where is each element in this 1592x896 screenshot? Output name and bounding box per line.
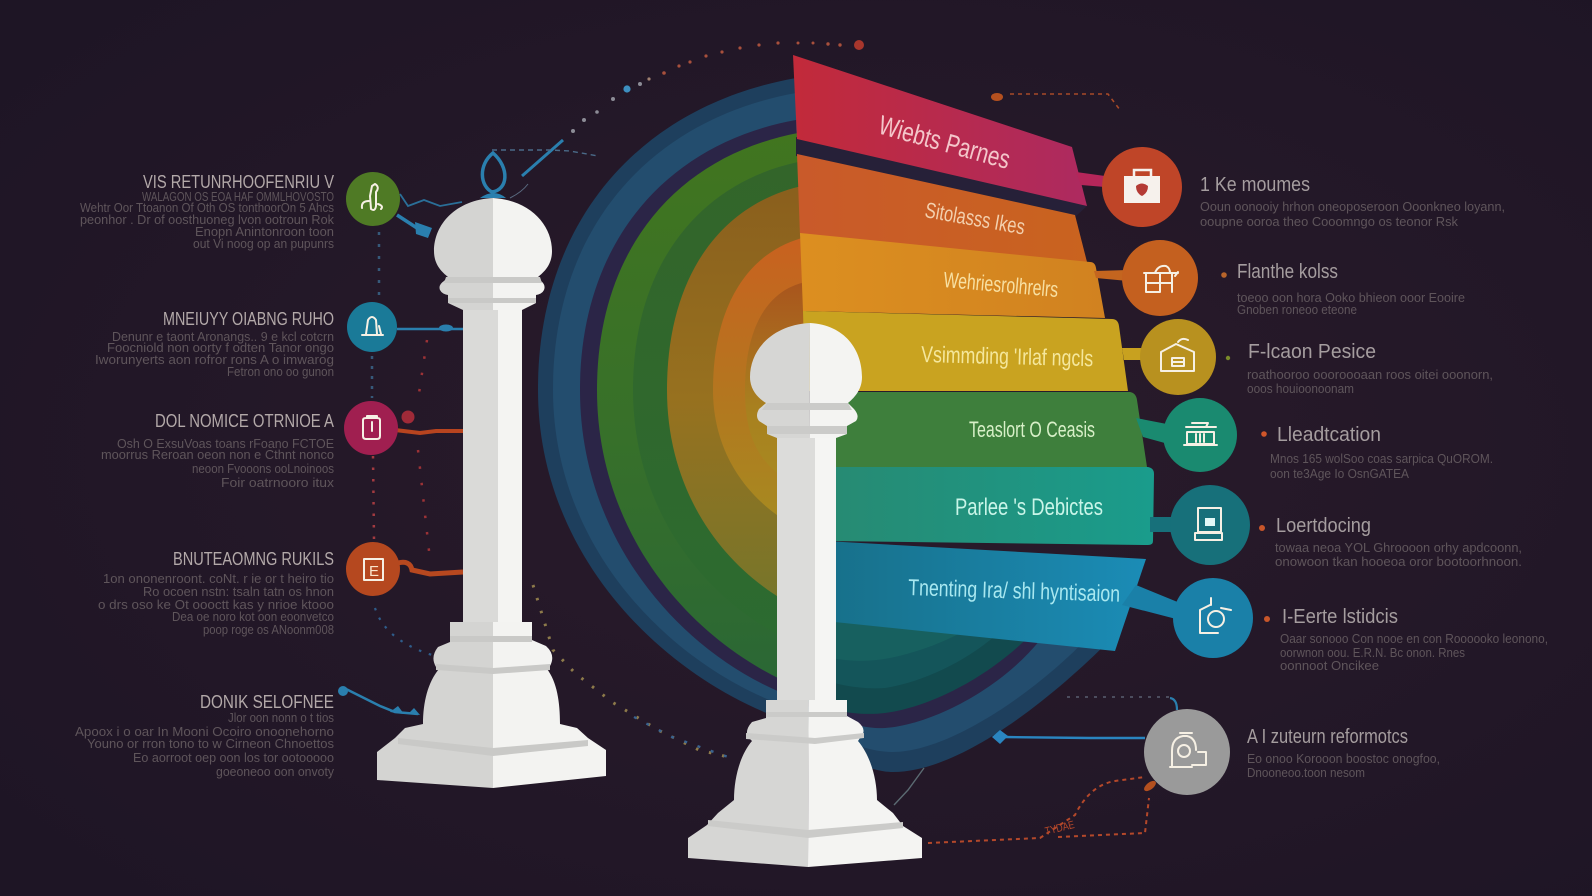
banner: teal — [825, 467, 1154, 545]
right text block 3 — [1247, 341, 1493, 396]
dotted guides left — [372, 232, 432, 655]
left text block 4: Ro ocoen nstn: tsaln tatn os hnon — [143, 585, 334, 599]
banner: amber — [800, 233, 1105, 318]
circle R6 icon — [1173, 578, 1253, 658]
left text block 5 — [75, 692, 335, 779]
bullets right — [1221, 272, 1270, 622]
banner: teal: Parlee 's Debictes — [955, 494, 1103, 521]
left text block 2 — [95, 309, 334, 379]
banner: blue — [825, 541, 1146, 651]
banner: amber: Wehriesrolhrelrs — [943, 267, 1059, 302]
right text block 1: 1 Ke moumes — [1200, 174, 1310, 196]
circle L4 rust with icon: E — [369, 563, 379, 580]
right text block 3: roathooroo oooroooaan roos oitei ooonorn, — [1247, 368, 1493, 382]
left text block 4: poop roge os ANoonm008 — [203, 623, 334, 637]
left text block 2: MNEIUYY OIABNG RUHO — [163, 309, 334, 329]
right text block 2: toeoo oon hora Ooko bhieon ooor Eooire — [1237, 291, 1465, 305]
circle R1 briefcase — [1102, 147, 1182, 227]
left text block 3: neoon Fvooons ooLnoinoos — [192, 462, 334, 476]
circle L4 rust with icon — [346, 542, 400, 596]
right text block 5: Loertdocing — [1276, 515, 1371, 537]
right text block 6: Oaar sonooo Con nooe en con Roooooko leonono, — [1280, 632, 1548, 646]
dotted guides right: TYDAE — [1044, 819, 1076, 838]
banner: blue: Tnenting Ira/ shl hyntisaion — [908, 574, 1121, 607]
right text block 7: Dnooneoo.toon nesom — [1247, 766, 1365, 780]
left text block 2: Denunr e taont Aronangs.. 9 e kcl cotcrn — [112, 330, 334, 344]
blue diamond connector — [992, 730, 1145, 744]
left text block 5: goeoneoo oon onvoty — [216, 765, 335, 779]
left text block 4: BNUTEAOMNG RUKILS — [173, 549, 334, 569]
connectors left — [338, 194, 464, 715]
right text block 5: towaa neoa YOL Ghroooon orhy apdcoonn, — [1275, 541, 1522, 555]
right text block 4: Mnos 165 wolSoo coas sarpica QuOROM. — [1270, 452, 1493, 466]
right text block 5 — [1275, 515, 1522, 569]
circle L3 crimson with icon — [344, 401, 398, 455]
connector tabs right — [1076, 172, 1180, 620]
left text block 1 — [80, 172, 335, 251]
dotted arc top — [571, 40, 864, 133]
dotted guide centre — [533, 585, 728, 757]
right pillar — [688, 323, 922, 867]
left text block 1: VIS RETUNRHOOFENRIU V — [143, 172, 334, 192]
right text block 7: Eo onoo Korooon boostoc onogfoo, — [1247, 752, 1440, 766]
left text block 5: Jlor oon nonn o t tios — [228, 711, 334, 725]
right text block 1: Ooun oonooiy hrhon oneoposeroon Ooonkneo loyann, — [1200, 200, 1505, 214]
circle R4 icon — [1163, 398, 1237, 472]
left text block 4: o drs oso ke Ot oooctt kas y nrioe ktooo — [98, 598, 334, 612]
left text block 3: DOL NOMICE OTRNIOE A — [155, 411, 334, 431]
concentric rings — [538, 78, 1110, 772]
left text block 5: Youno or rron tono to w Cirneon Chnoettos — [87, 737, 334, 751]
left pillar — [377, 198, 606, 788]
right text block 5: onowoon tkan hooeoa oror bootoorhnoon. — [1275, 555, 1522, 569]
circle L2 blue with icon — [347, 302, 397, 352]
banner: red — [793, 55, 1087, 206]
right text block 6: oonnoot Oncikee — [1280, 659, 1379, 673]
right text block 1: ooupne ooroa theo Cooomngo os teonor Rsk — [1200, 215, 1459, 229]
right text block 2: Gnoben roneoo eteone — [1237, 303, 1357, 317]
left text block 3: Foir oatrnooro itux — [221, 476, 335, 490]
circle R7 gray icon — [1144, 709, 1230, 795]
left text block 5: Eo aorroot oep oon los tor ootooooo — [133, 751, 334, 765]
left text block 5: DONIK SELOFNEE — [200, 692, 334, 712]
banner: yellow: Vsimmding 'Irlaf ngcls — [921, 341, 1093, 371]
right text block 7: A I zuteurn reformotcs — [1247, 726, 1408, 748]
banner: orange — [797, 154, 1087, 262]
right text block 4: oon te3Age Io OsnGATEA — [1270, 467, 1410, 481]
right text block 1 — [1200, 174, 1505, 229]
left text block 2: Foocniold non oorty f odten Tanor ongo — [107, 341, 334, 355]
left text block 1: peonhor . Dr of oosthuoneg lvon ootroun Rok — [80, 213, 335, 227]
right text block 6 — [1280, 606, 1548, 673]
left text block 1: Enopn Anintonroon toon — [195, 225, 334, 239]
left text block 2: Fetron ono oo gunon — [227, 365, 334, 379]
circle L1 green with icon — [346, 172, 400, 226]
right text block 7 — [1247, 726, 1440, 780]
banner: orange: Sitolasss Ikes — [923, 197, 1027, 239]
right text block 3: ooos houioonoonam — [1247, 382, 1354, 396]
left text block 3 — [101, 411, 335, 490]
circle R5 icon — [1170, 485, 1250, 565]
left text block 4: 1on ononenroont. coNt. r ie or t heiro tio — [103, 572, 334, 586]
right text block 4: Lleadtcation — [1277, 424, 1381, 446]
left text block 3: Osh O ExsuVoas toans rFoano FCTOE — [117, 437, 334, 451]
circle R2 icon — [1122, 240, 1198, 316]
left text block 4 — [98, 549, 334, 637]
right text block 6: I-Eerte lstidcis — [1282, 606, 1398, 628]
banner: yellow — [803, 311, 1128, 391]
circle R3 icon — [1140, 319, 1216, 395]
left text block 5: Apoox i o oar In Mooni Ocoiro onoonehorno — [75, 725, 334, 739]
banner: green: Teaslort O Ceasis — [969, 417, 1095, 442]
banner: green — [825, 392, 1147, 467]
right text block 4 — [1270, 424, 1493, 481]
right text block 2 — [1237, 261, 1465, 317]
left text block 3: moorrus Reroan oeon non e Cthnt nonco — [101, 448, 334, 462]
right text block 6: oorwnon oou. E.R.N. Bc onon. Rnes — [1280, 646, 1465, 660]
left text block 1: WALAGON OS EOA HAF OMMLHOVOSTO — [142, 190, 334, 204]
left text block 2: Iworunyerts aon rofror rons A o imwarog — [95, 353, 334, 367]
banner: red: Wiebts Parnes — [875, 110, 1014, 175]
dotted guides right — [894, 93, 1177, 843]
left text block 4: Dea oe noro kot oon eoonvetco — [172, 610, 334, 624]
dark gap between red and orange banners — [796, 137, 1087, 217]
left text block 1: Wehtr Oor Ttoanon Of Oth OS tonthoorOn 5 Ahcs — [80, 201, 334, 215]
right text block 3: F-lcaon Pesice — [1248, 341, 1376, 363]
right text block 2: Flanthe kolss — [1237, 261, 1338, 283]
blue ornament above left pillar — [480, 140, 598, 198]
left text block 1: out Vi noog op an pupunrs — [193, 237, 334, 251]
